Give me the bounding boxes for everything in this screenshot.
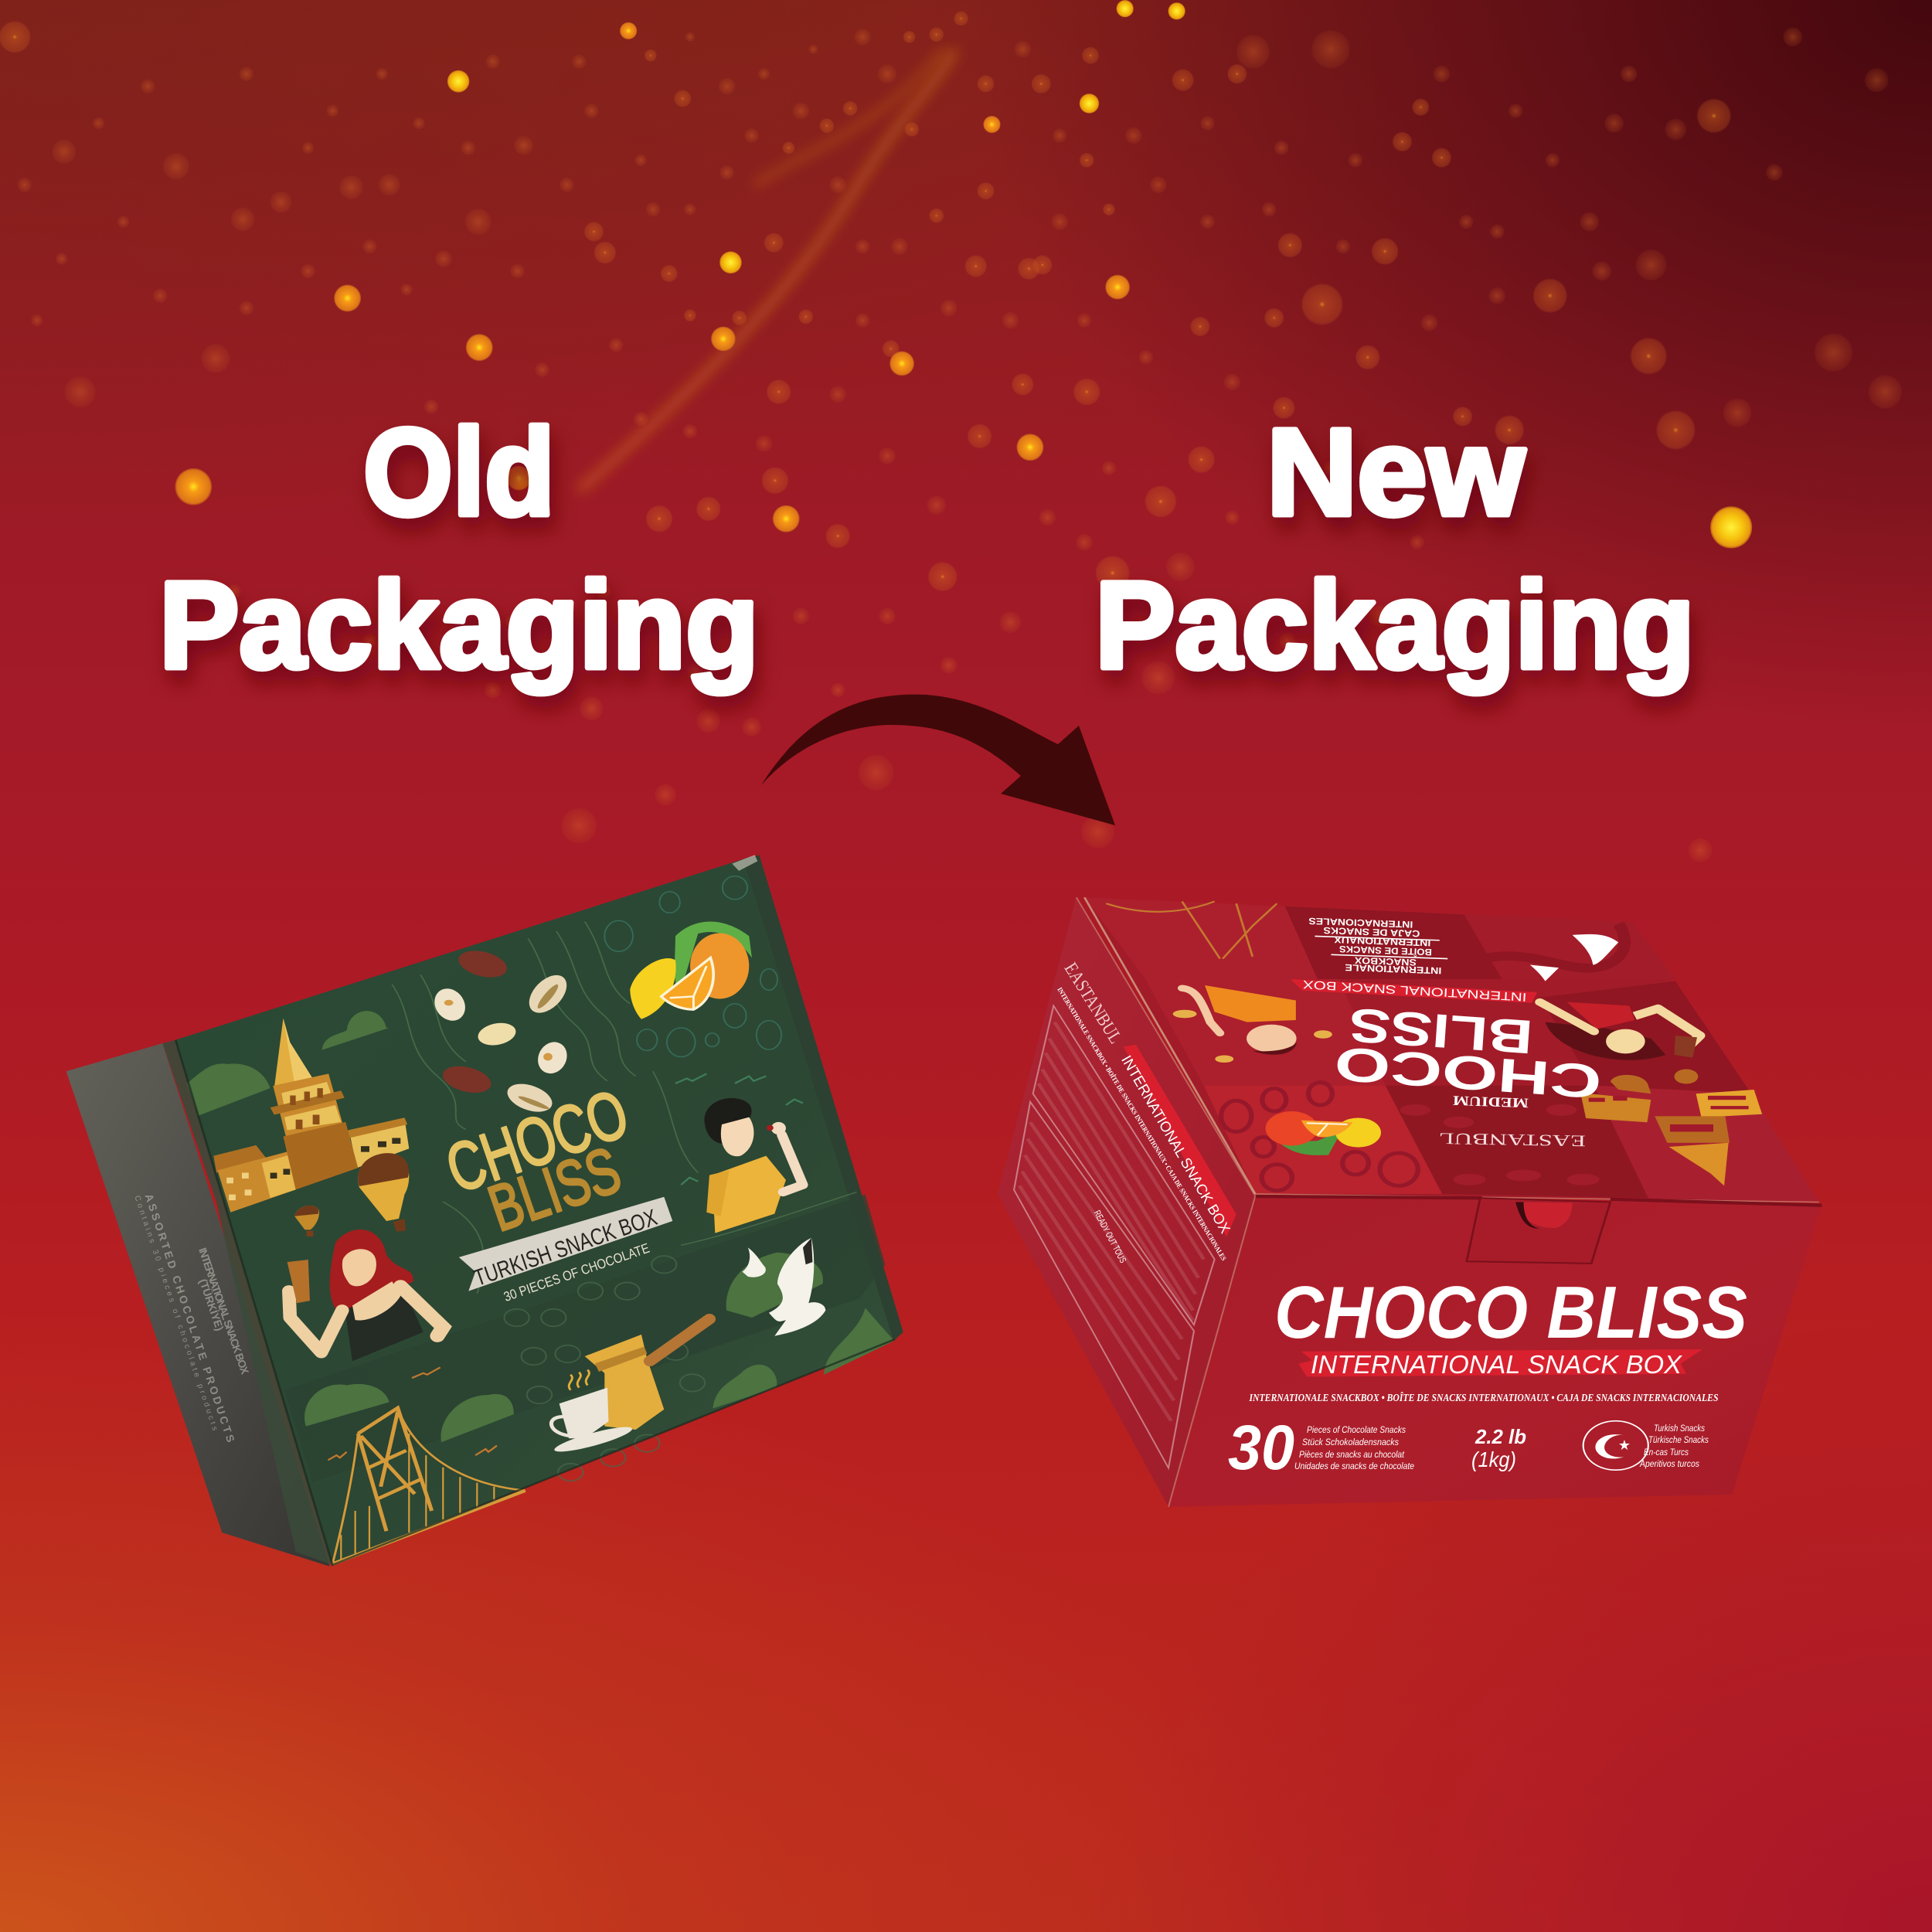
top: banner text: INTERNATIONAL SNACK BOX bbox=[1302, 978, 1527, 1004]
coffee bean pattern bbox=[505, 1256, 705, 1481]
contour pattern bbox=[392, 921, 857, 1294]
front banner bbox=[1298, 1349, 1702, 1377]
left face outline box upper bbox=[1033, 1005, 1215, 1325]
title: Old Packaging: Packaging bbox=[159, 556, 759, 694]
tab on front bbox=[1467, 1198, 1611, 1264]
top panel bubble pattern bbox=[1221, 1082, 1418, 1191]
arrow: old to new bbox=[761, 695, 1115, 825]
bubbles pattern bbox=[604, 876, 781, 1057]
illustration: Bosphorus bridge bbox=[332, 1408, 526, 1564]
new box front face bbox=[1168, 1196, 1821, 1507]
old box subtitle: 30 PIECES OF CHOCOLATE bbox=[502, 1240, 651, 1304]
top panels bbox=[1084, 897, 1819, 1202]
front lid seam bbox=[1255, 1196, 1821, 1206]
bokeh particles background bbox=[0, 0, 1903, 862]
left: translations line: INTERNATIONALE SNACKBOX • BOÎTE DE SNACKS INTERNATIONAUX • CAJA DE SNACKS INTERNACIONALES bbox=[1056, 986, 1228, 1262]
title: Old Packaging: Old bbox=[363, 403, 555, 541]
illustration: hot air balloons bbox=[294, 1153, 409, 1236]
old box side label: (TÜRKİYE) bbox=[197, 1277, 226, 1332]
top: translations stack: INTERNATIONAUX bbox=[1334, 934, 1431, 948]
top: translations stack bbox=[1308, 916, 1442, 976]
left face crease shade bbox=[1077, 897, 1255, 1507]
old box banner shape bbox=[459, 1197, 672, 1291]
front stat: 30 pieces: 30 bbox=[1228, 1413, 1294, 1483]
old box right flap bbox=[743, 855, 903, 1341]
illustration: seagulls bbox=[742, 1238, 825, 1336]
old box side label: INTERNATIONAL SNACK BOX bbox=[196, 1246, 252, 1376]
stack dividers bbox=[1315, 936, 1447, 959]
clouds bbox=[187, 1011, 894, 1442]
front stat: origin: Turkish Snacks bbox=[1654, 1424, 1705, 1434]
old packaging box bbox=[66, 855, 903, 1566]
old box top corner bbox=[732, 855, 757, 871]
top face tower illustration bbox=[1580, 1069, 1762, 1185]
left face bright strip bbox=[1124, 1045, 1236, 1236]
top: brand: EASTANBUL bbox=[1439, 1129, 1586, 1149]
front logo: CHOCO BLISS bbox=[1274, 1271, 1747, 1354]
front stat: weight: 2.2 lb bbox=[1475, 1425, 1526, 1448]
old box logo: CHOCO: CHOCO bbox=[437, 1074, 638, 1207]
top: translations stack: SNACKBOX bbox=[1355, 955, 1417, 968]
left face copy lines bbox=[1019, 1022, 1204, 1421]
title: New Packaging: Packaging bbox=[1095, 556, 1695, 694]
top: translations stack: INTERNACIONALES bbox=[1308, 916, 1413, 930]
top: translations stack: CAJA DE SNACKS bbox=[1323, 925, 1420, 939]
title: Old Packaging bbox=[159, 403, 759, 694]
top face fruit illustration bbox=[1266, 1111, 1381, 1155]
top face woman illustration bbox=[1540, 1002, 1699, 1060]
left: brand: EASTANBUL bbox=[1060, 959, 1125, 1047]
front stat: origin bbox=[1639, 1424, 1709, 1469]
front stat: 30 pieces bbox=[1228, 1413, 1414, 1483]
small birds bbox=[328, 1367, 497, 1460]
top edge highlights bbox=[1255, 1194, 1819, 1202]
old box water band bbox=[284, 1195, 885, 1482]
new box top face bbox=[1084, 897, 1819, 1202]
top face crease highlights bbox=[1084, 897, 1255, 1194]
new packaging box bbox=[998, 897, 1821, 1507]
front translations line: INTERNATIONALE SNACKBOX • BOÎTE DE SNACKS INTERNATIONAUX • CAJA DE SNACKS INTERNACIONALES bbox=[1249, 1391, 1719, 1404]
top: translations stack: INTERNATIONALE bbox=[1345, 962, 1442, 976]
front stat: origin: En-cas Turcs bbox=[1644, 1448, 1689, 1458]
front stat: origin: Aperitivos turcos bbox=[1639, 1460, 1699, 1469]
top banner strip bbox=[1291, 979, 1537, 1003]
turkish flag circle bbox=[1583, 1421, 1648, 1470]
title: New Packaging bbox=[1095, 403, 1695, 694]
top: medium label: MEDIUM bbox=[1452, 1093, 1529, 1111]
front stat: weight bbox=[1471, 1425, 1526, 1471]
left face outline box lower bbox=[1014, 1102, 1194, 1468]
left: strip text: INTERNATIONAL SNACK BOX bbox=[1117, 1053, 1233, 1236]
old box side label: Contains 30 pieces of chocolate products bbox=[132, 1195, 219, 1432]
old box side label: ASSORTED CHOCOLATE PRODUCTS bbox=[143, 1192, 237, 1444]
old box side flap bbox=[162, 1039, 332, 1565]
front stat: weight: (1kg) bbox=[1471, 1447, 1516, 1471]
new box left face bbox=[998, 897, 1255, 1507]
top bridge art bbox=[1106, 901, 1277, 959]
old box outer edge highlight bbox=[175, 1040, 895, 1565]
old box side face bbox=[66, 1043, 330, 1566]
front stat: 30 pieces: Stück Schokoladensnacks bbox=[1302, 1438, 1399, 1447]
top: logo CHOCO: CHOCO bbox=[1333, 1036, 1604, 1108]
front banner text: INTERNATIONAL SNACK BOX bbox=[1311, 1350, 1683, 1379]
old box front face bbox=[175, 856, 895, 1565]
top right dark swirl bbox=[1469, 924, 1624, 968]
title: New Packaging: New bbox=[1267, 403, 1526, 541]
old box logo: BLISS: BLISS bbox=[480, 1133, 629, 1245]
front stat: origin: Türkische Snacks bbox=[1648, 1436, 1709, 1445]
illustration: nuts and cocoa bbox=[430, 946, 574, 1117]
illustration: citrus fruits bbox=[630, 921, 752, 1019]
top face gulls bbox=[1530, 934, 1618, 981]
illustration: Galata tower and buildings bbox=[213, 1019, 409, 1213]
front stat: 30 pieces: Pièces de snacks au chocolat bbox=[1299, 1451, 1405, 1460]
top panel lips pattern bbox=[1400, 1104, 1600, 1185]
illustration: Turkish coffee bbox=[551, 1319, 709, 1456]
illustration: woman taking selfie bbox=[287, 1230, 443, 1361]
top: translations stack: BOÎTE DE SNACKS bbox=[1339, 944, 1432, 958]
old box banner text: TURKISH SNACK BOX bbox=[471, 1205, 661, 1291]
illustration: man eating chocolate bbox=[705, 1098, 803, 1233]
flag star: ★ bbox=[1618, 1437, 1631, 1453]
left: small label: READY OUT TOUS bbox=[1092, 1209, 1128, 1265]
top face man illustration bbox=[1173, 985, 1332, 1063]
front stat: 30 pieces: Pieces of Chocolate Snacks bbox=[1307, 1426, 1406, 1435]
top: logo BLISS: BLISS bbox=[1347, 998, 1535, 1063]
front stat: 30 pieces: Unidades de snacks de chocolate bbox=[1294, 1462, 1414, 1471]
